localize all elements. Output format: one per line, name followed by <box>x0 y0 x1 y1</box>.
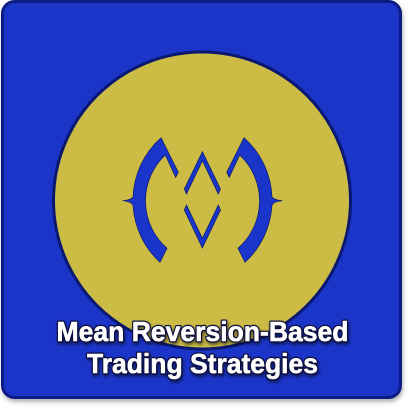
icon: upper chevron <box>184 152 220 194</box>
title outline: Mean Reversion-Based <box>56 316 348 347</box>
title <box>56 316 348 379</box>
title outline: Trading Strategies <box>87 348 318 379</box>
title outline <box>56 316 348 379</box>
icon: left arc <box>123 138 178 262</box>
title line 1: Mean Reversion-Based <box>56 316 348 347</box>
icon: right arc <box>227 138 282 262</box>
gold circle <box>54 52 350 349</box>
icon: lower chevron <box>184 205 220 248</box>
title line 2: Trading Strategies <box>87 348 318 379</box>
icon: mean reversion symbol <box>123 138 282 262</box>
